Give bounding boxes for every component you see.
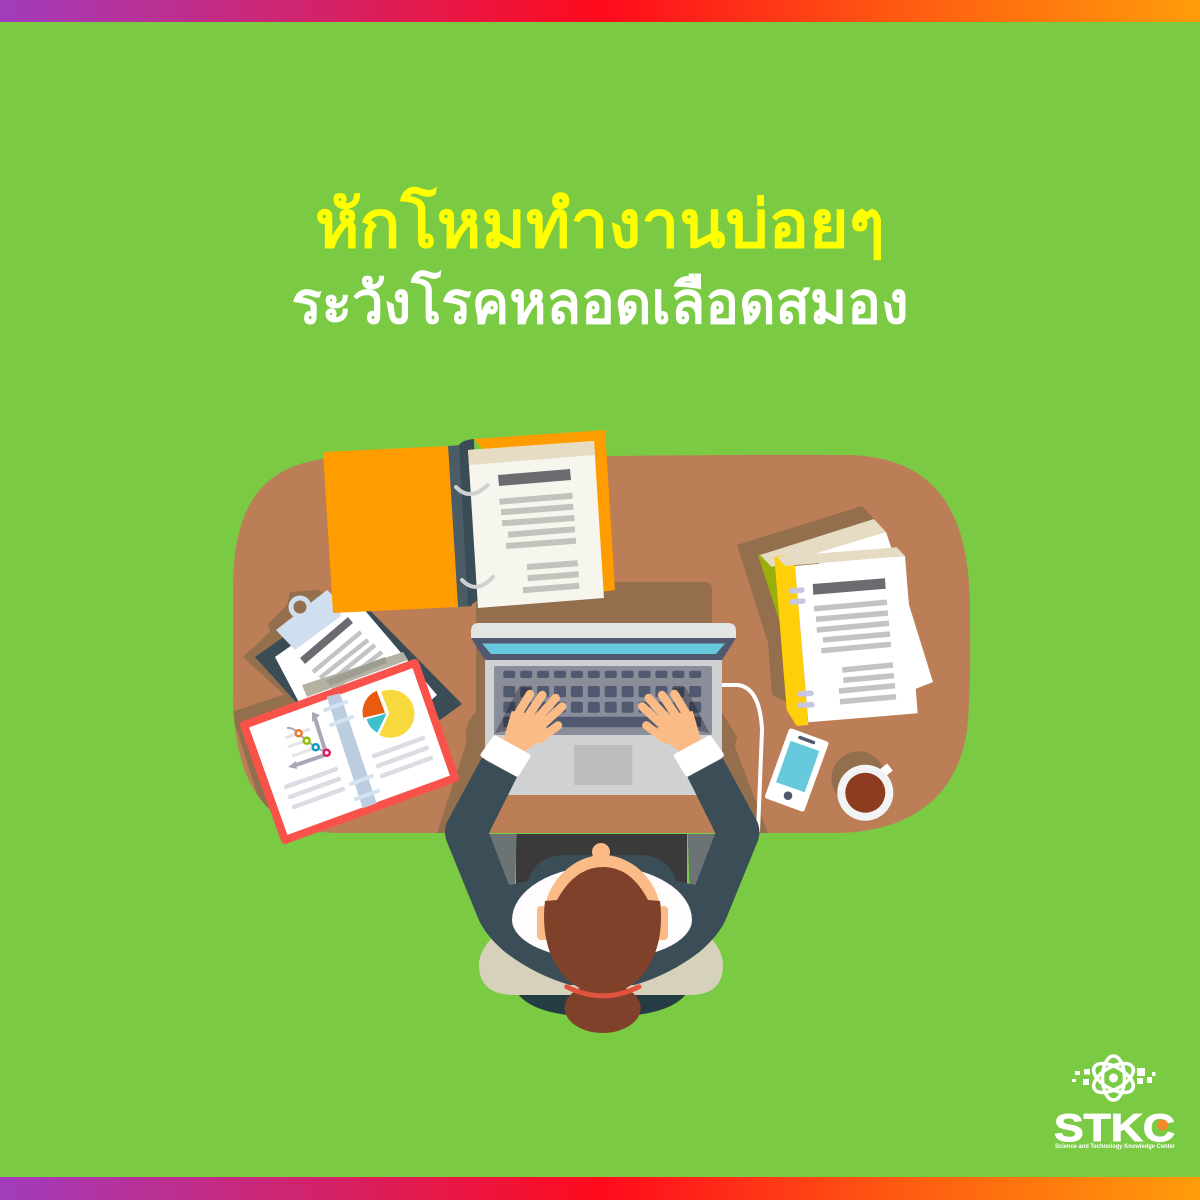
logo wordmark: STKC — [1054, 1107, 1175, 1150]
suit body and arms — [445, 758, 759, 985]
left cuff — [483, 738, 528, 774]
laptop — [471, 623, 736, 795]
logo orange dot — [1157, 1120, 1168, 1130]
logo tagline: Science and Technology Knowledge Center — [1055, 1144, 1176, 1150]
shirt — [512, 866, 692, 960]
left hand — [502, 694, 562, 753]
notebook shadow — [234, 694, 296, 810]
line chart — [285, 712, 330, 769]
desk — [233, 455, 970, 833]
phone — [768, 731, 826, 809]
top gradient bar — [0, 0, 1200, 22]
clipboard — [243, 590, 462, 780]
pie chart — [363, 690, 414, 738]
right hand — [642, 694, 702, 753]
desk shadows — [437, 582, 768, 833]
head — [537, 843, 668, 1033]
right stacked notebooks — [737, 506, 933, 726]
right cuff — [676, 738, 721, 774]
orange binder — [323, 430, 615, 613]
laptop cable — [722, 685, 762, 832]
title: white subheadline: ระวังโรคหลอดเลือดสมอง — [292, 268, 908, 336]
STKC logo — [1054, 1056, 1176, 1150]
coffee cup — [831, 751, 893, 821]
red open notebook — [244, 663, 455, 840]
logo atom icon — [1072, 1056, 1156, 1100]
keyboard keys — [503, 671, 701, 727]
chair — [479, 834, 723, 1017]
bottom gradient bar — [0, 1177, 1200, 1200]
title: yellow headline: หักโหมทำงานบ่อยๆ — [315, 185, 885, 261]
hand shadows — [495, 687, 709, 733]
